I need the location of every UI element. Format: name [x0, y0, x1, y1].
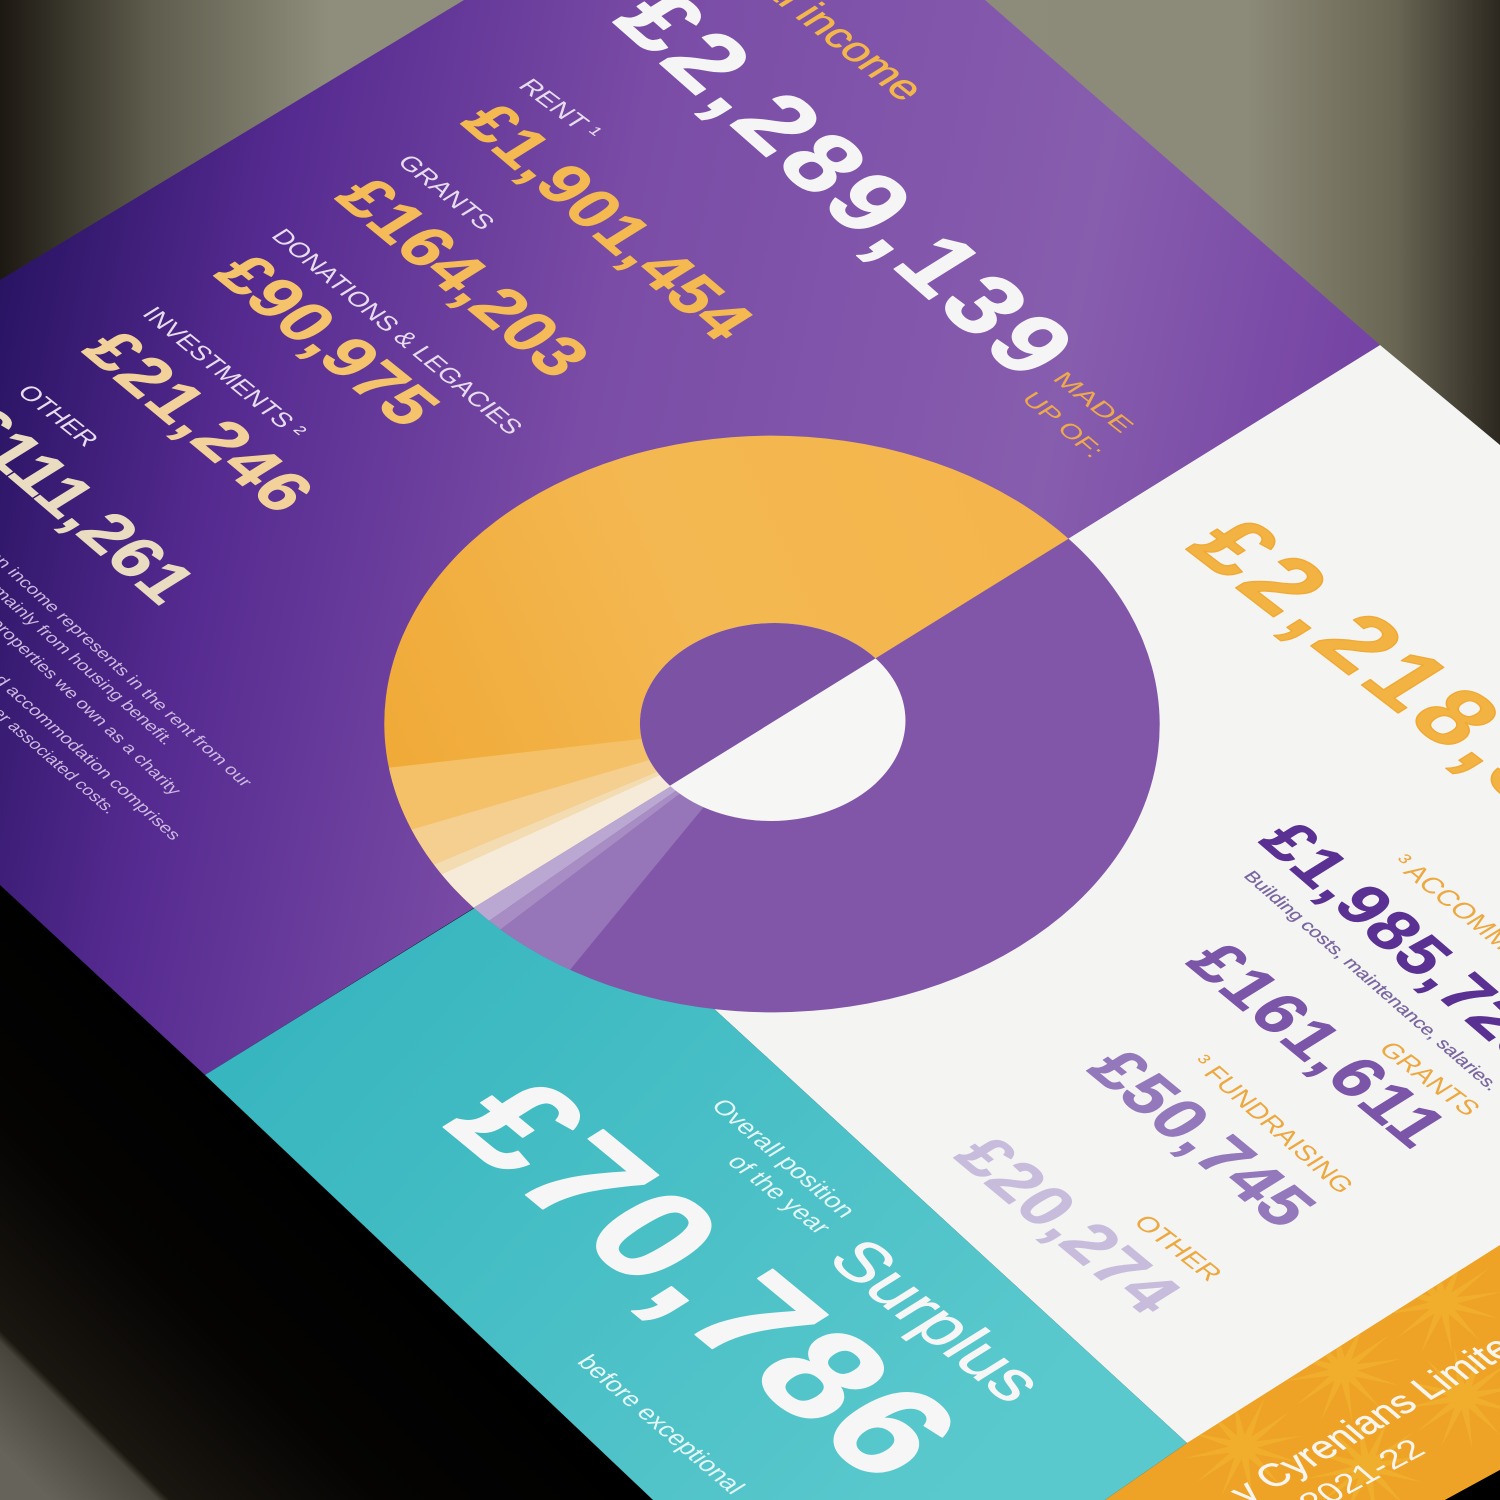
- donut ring segments: [384, 436, 1160, 1012]
- donations label: DONATIONS & LEGACIES: [265, 225, 529, 439]
- grants label: GRANTS: [391, 151, 501, 234]
- income wedge: investments: [434, 772, 660, 874]
- income half: orange: [384, 436, 1068, 908]
- other label: OTHER: [1127, 1210, 1229, 1286]
- other figure: £20,274: [940, 1125, 1197, 1325]
- income wedge: donations: [412, 760, 657, 864]
- expenditure wedge: grants: [500, 794, 704, 970]
- overall position caption: Overall position: [705, 1095, 861, 1222]
- footer background: [1105, 1245, 1500, 1500]
- accommodation description: Building costs, maintenance, salaries.: [1240, 868, 1500, 1094]
- rent label: RENT ¹: [512, 75, 608, 143]
- expenditure half: purple: [474, 538, 1160, 1012]
- panel: purple income: [0, 0, 1380, 1075]
- grants label: GRANTS: [1372, 1037, 1487, 1120]
- paper corner shadow: [1445, 1470, 1500, 1500]
- expenditure wedge: other: [474, 786, 676, 921]
- overall position caption: of the year: [721, 1151, 837, 1238]
- rent figure: £1,901,454: [448, 91, 770, 351]
- panel: white expenditure: [470, 345, 1500, 1443]
- donut chart: [384, 436, 1160, 1012]
- donut centre: [640, 623, 906, 821]
- expenditure wedge: fundraising: [489, 791, 680, 930]
- surplus figure: £70,786: [414, 1053, 995, 1500]
- starburst pattern: [1186, 1269, 1500, 1500]
- made up of label: [1016, 368, 1139, 462]
- income wedge: other: [442, 775, 671, 908]
- income wedge: grants: [389, 739, 649, 830]
- teal panel background: [205, 860, 1187, 1500]
- made up of label: MADE: [1047, 368, 1139, 437]
- investments label: INVESTMENTS ²: [136, 303, 312, 443]
- surplus heading: Surplus: [813, 1228, 1061, 1413]
- purple panel background: [0, 0, 1380, 1075]
- before exceptional caption: before exceptional: [571, 1351, 751, 1499]
- fundraising label: ³ FUNDRAISING: [1185, 1050, 1361, 1198]
- white panel background: [470, 345, 1500, 1443]
- panel: teal surplus: [205, 860, 1187, 1500]
- other label: OTHER: [11, 381, 104, 451]
- grants figure: £161,611: [1172, 931, 1463, 1158]
- grants figure: £164,203: [321, 166, 606, 389]
- fundraising figure: £50,745: [1073, 1038, 1332, 1238]
- footnotes text block: [0, 547, 256, 843]
- made up of label: UP OF:: [1016, 388, 1110, 462]
- donations figure: £90,975: [200, 243, 456, 438]
- panel: orange footer: [1105, 1238, 1500, 1500]
- investments figure: £21,246: [68, 319, 330, 524]
